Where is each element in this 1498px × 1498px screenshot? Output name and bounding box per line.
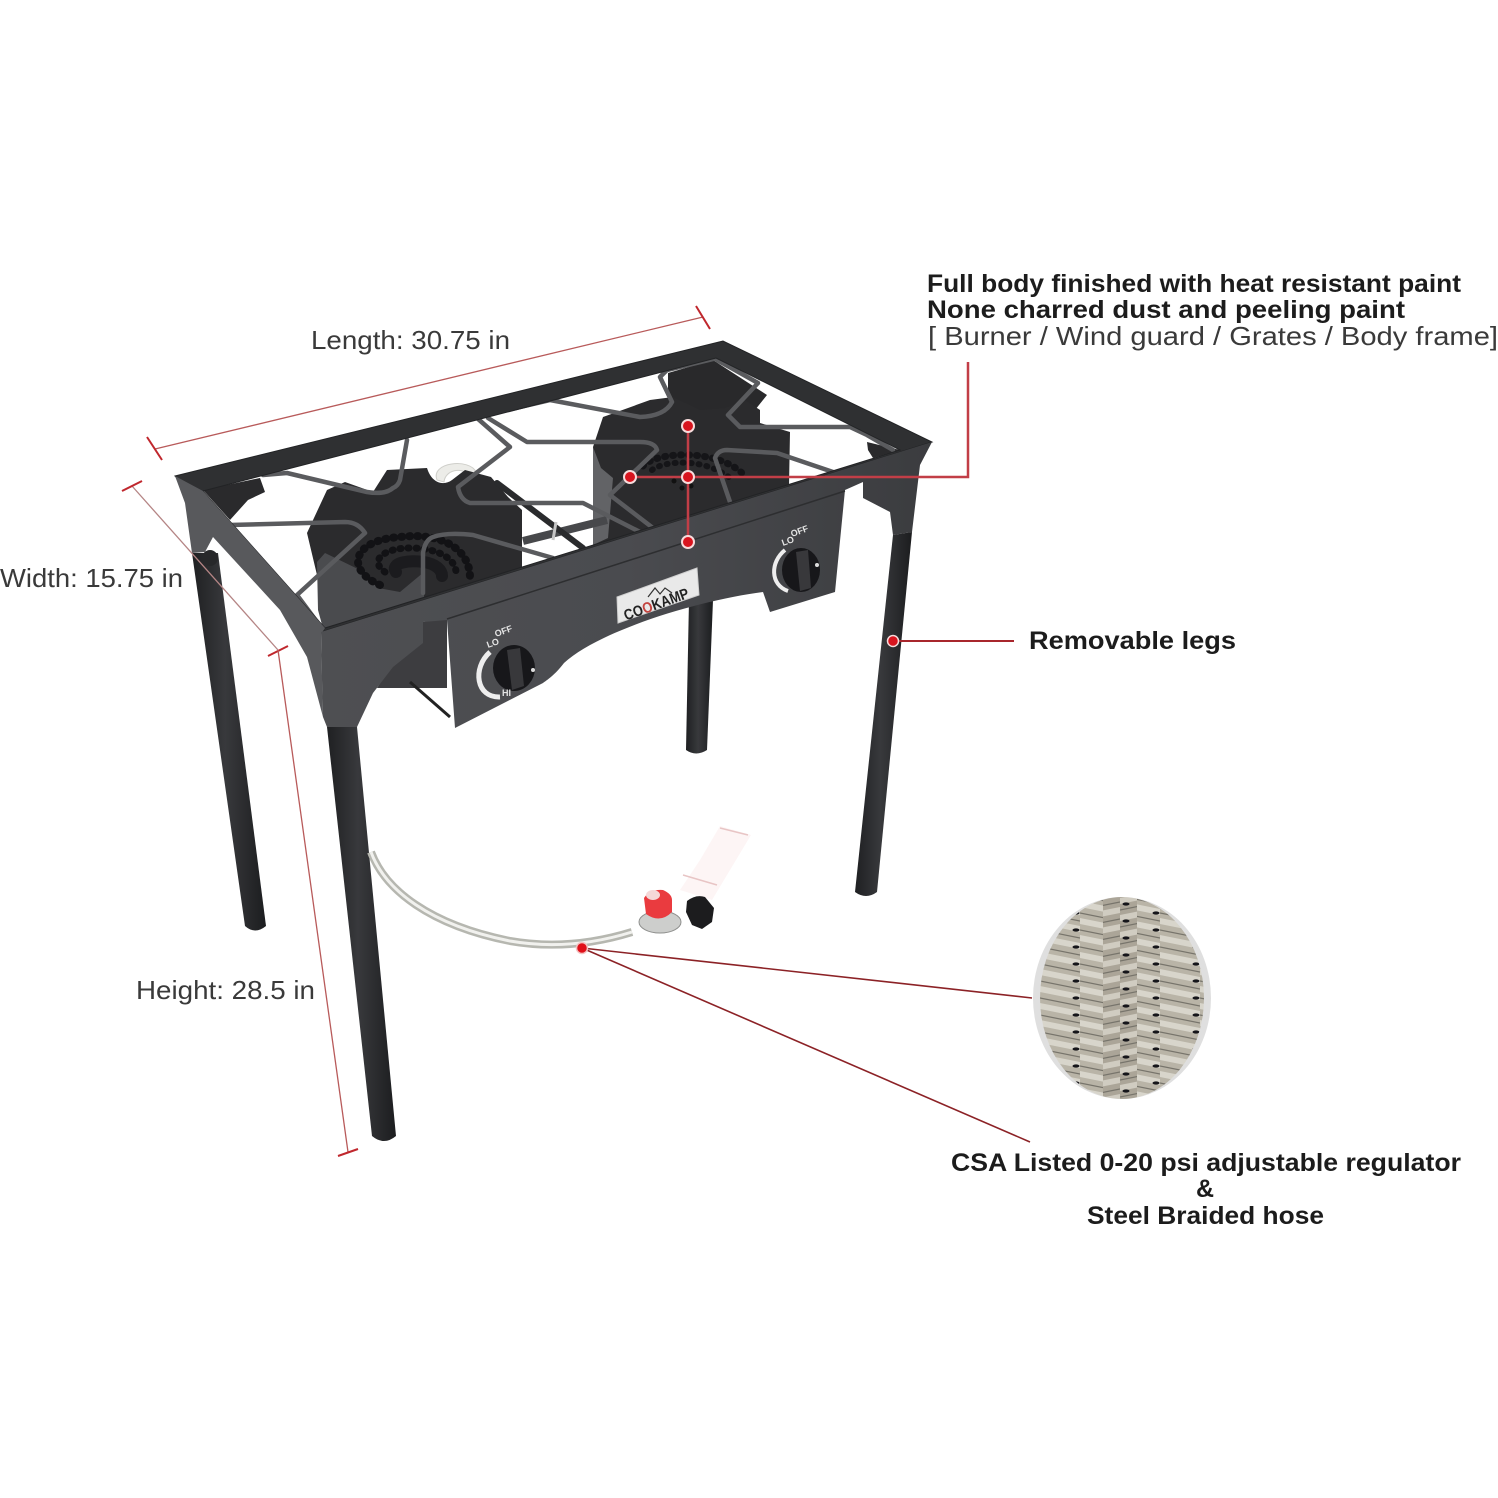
lower burner wire bracket (410, 682, 450, 717)
right control knob (774, 523, 820, 592)
dimension: width (122, 481, 288, 656)
right burner back plate (668, 360, 767, 412)
right control knob: OFF (789, 523, 810, 539)
left control knob: HI (502, 688, 511, 698)
heading: paint finish: [ Burner / Wind guard / Grates / Body frame] (928, 321, 1498, 351)
left side rail (175, 476, 325, 717)
centre gas rods (497, 483, 607, 548)
label: removable legs: Removable legs (1029, 627, 1236, 655)
heading: paint finish: None charred dust and peeling paint (927, 296, 1406, 324)
back left leg (192, 553, 266, 930)
left burner lower cylinder (377, 617, 447, 688)
far left flange (203, 478, 265, 520)
left control knob (479, 623, 535, 698)
left control knob: OFF (493, 623, 514, 639)
label: length: Length: 30.75 in (311, 325, 510, 355)
stove product drawing (175, 341, 932, 1141)
label: regulator and hose: & (1196, 1175, 1214, 1203)
logo plate: COOKAMP (622, 585, 691, 624)
frame top rim (175, 341, 932, 632)
front left leg (327, 727, 396, 1141)
left leg joint (202, 550, 218, 566)
left burner ring (358, 536, 470, 585)
left burner lower wall (317, 553, 424, 632)
right burner wind guard (593, 397, 790, 545)
dimension: length (147, 306, 710, 460)
dimension: height (278, 650, 358, 1156)
right burner ring (643, 455, 742, 490)
callout: heat resistant paint lines and dots (624, 362, 968, 548)
left burner wind guard (307, 468, 522, 622)
right control knob: LO (780, 534, 795, 548)
label: regulator and hose: CSA Listed 0-20 psi adjustable regulator (951, 1149, 1461, 1177)
gas hose and regulator (371, 826, 751, 945)
red adjuster knob (644, 890, 672, 919)
callout: removable legs pointer (888, 636, 1014, 646)
black POL nut (686, 896, 714, 929)
right leg (855, 532, 912, 896)
label: width: Width: 15.75 in (0, 563, 183, 593)
left control knob: LO (485, 636, 500, 650)
logo plate (617, 568, 699, 624)
pink wrapper (680, 826, 751, 900)
panel top crease (447, 491, 845, 619)
right burner lower wall (593, 447, 613, 545)
back right leg (686, 600, 713, 754)
heading: paint finish: Full body finished with heat resistant paint (927, 270, 1462, 298)
braided hose close-up (1033, 897, 1211, 1099)
burner grates (230, 358, 893, 630)
label: regulator and hose: Steel Braided hose (1087, 1202, 1324, 1230)
steel hose (371, 852, 632, 945)
label: regulator and hose (951, 1149, 1461, 1230)
heading: paint finish (927, 270, 1498, 351)
regulator body (639, 911, 681, 933)
label: height: Height: 28.5 in (136, 975, 315, 1005)
front skirt and control panel (321, 442, 932, 728)
infographic canvas (0, 274, 1496, 1224)
white valve handle (436, 464, 476, 482)
far right flange (867, 442, 900, 458)
callout: hose pointers (576, 942, 1032, 1142)
